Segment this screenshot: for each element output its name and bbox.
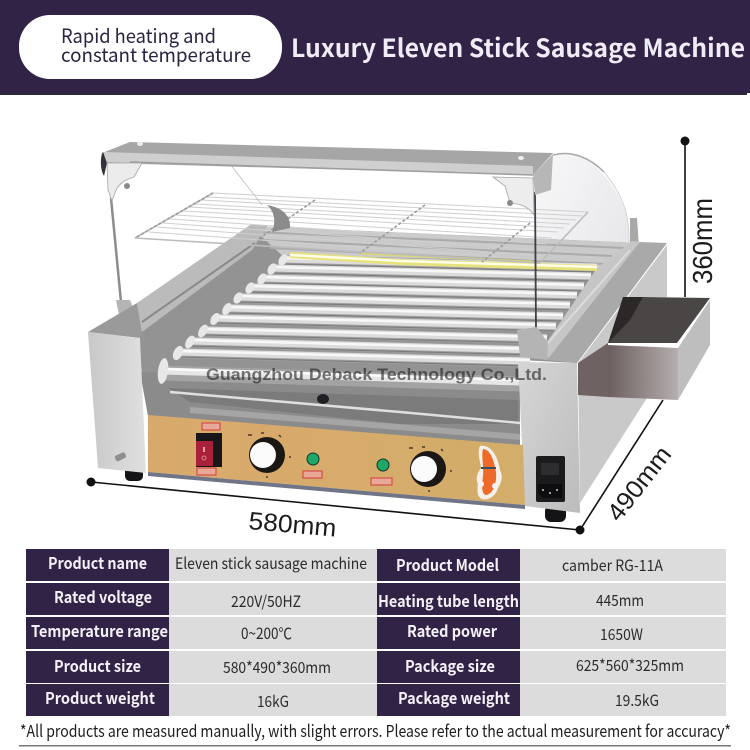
- product photo: sausage roller machine: [88, 142, 710, 522]
- dimension: height 360mm: [680, 136, 718, 297]
- row: voltage and tube length: Rated voltage: [54, 584, 152, 608]
- row: product and package size: Package size: [405, 653, 495, 677]
- left rail: [137, 225, 268, 332]
- row: product and package size: [26, 651, 726, 683]
- power socket: [536, 456, 565, 502]
- gold control panel: [148, 415, 525, 509]
- side storage bin: [608, 297, 710, 400]
- green indicator lights: [307, 453, 389, 471]
- right glass foot: [517, 327, 548, 360]
- right glass edge: [535, 192, 536, 330]
- row: product name and model: Eleven stick sausage machine: [175, 552, 367, 574]
- left hinge bracket: [107, 163, 142, 201]
- left glass foot: [116, 300, 141, 337]
- row: product and package weight: Product weight: [45, 685, 155, 709]
- inner cavity: [138, 226, 640, 446]
- red warning labels: [197, 423, 392, 485]
- row: product name and model: [26, 549, 726, 581]
- sausage mascot sticker: [477, 446, 502, 499]
- pill: rapid heating: Rapid heating and: [61, 20, 216, 49]
- pill: rapid heating: constant temperature: [61, 39, 251, 68]
- wire grill shelf: [135, 193, 588, 263]
- thin support wire: [230, 164, 262, 205]
- machine feet: [125, 466, 566, 522]
- header banner: [0, 0, 750, 95]
- drip tray: [140, 372, 520, 446]
- right hinge bracket: [493, 177, 534, 215]
- left glass rod: [111, 198, 121, 302]
- right side wall: [578, 245, 667, 503]
- row: product and package size: 625*560*325mm: [576, 654, 684, 676]
- roller end caps: [156, 253, 289, 385]
- row: product and package weight: 16kG: [257, 690, 289, 712]
- pill: rapid heating: [19, 15, 282, 79]
- right rear post: [630, 218, 639, 252]
- rocker switch: [196, 433, 222, 467]
- specification table: [26, 549, 726, 716]
- dimension: depth 490mm: 490mm: [602, 441, 677, 527]
- dimension: width 580mm: [86, 478, 580, 543]
- row: product and package size: Product size: [54, 653, 141, 677]
- row: temperature and power: [26, 617, 726, 649]
- row: temperature and power: Rated power: [407, 618, 497, 642]
- row: product and package size: 580*490*360mm: [223, 656, 331, 678]
- row: voltage and tube length: [26, 583, 726, 615]
- left front side panel: [88, 303, 146, 473]
- title: Luxury Eleven Stick Sausage Machine: [291, 29, 745, 65]
- right front side panel: [518, 362, 580, 513]
- row: temperature and power: 1650W: [600, 623, 643, 645]
- row: product name and model: camber RG-11A: [562, 554, 664, 576]
- right temperature knob: [409, 447, 452, 491]
- dimension: depth 490mm: [576, 400, 677, 534]
- row: product name and model: Product Model: [396, 552, 499, 576]
- eleven rollers: [163, 258, 597, 384]
- row: voltage and tube length: 220V/50HZ: [231, 590, 301, 612]
- row: temperature and power: Temperature range: [31, 618, 168, 642]
- screw: [114, 452, 127, 462]
- row: product and package weight: Package weight: [398, 685, 510, 709]
- dimension: width 580mm: 580mm: [247, 507, 338, 543]
- row: voltage and tube length: 445mm: [596, 589, 644, 611]
- watermark: Guangzhou Deback Technology Co.,Ltd.: [206, 365, 547, 384]
- dimension: height 360mm: 360mm: [687, 198, 718, 284]
- row: temperature and power: 0~200℃: [241, 622, 292, 644]
- row: product and package weight: [26, 684, 726, 716]
- row: product and package weight: 19.5kG: [615, 689, 659, 711]
- left temperature knob: [248, 433, 291, 477]
- top lid bar: [101, 142, 553, 195]
- row: voltage and tube length: Heating tube length: [378, 588, 519, 612]
- row: product name and model: Product name: [48, 550, 147, 574]
- curved glass dome: [535, 154, 629, 335]
- right inner strip and top rail: [545, 241, 667, 363]
- yellow heating glow: [290, 253, 597, 268]
